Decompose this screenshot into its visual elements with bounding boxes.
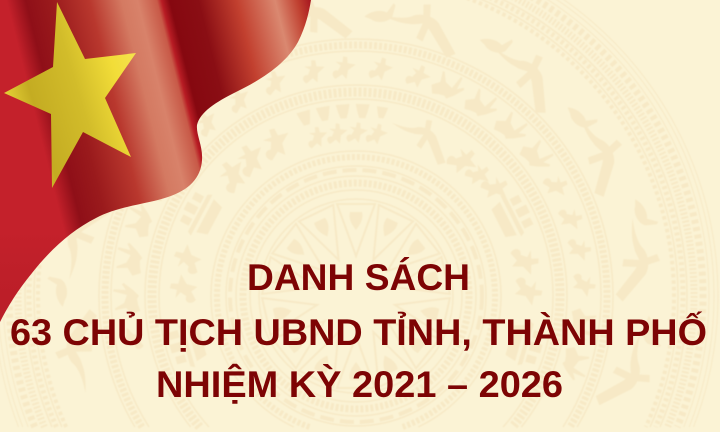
title <box>10 257 707 405</box>
icon: flag star <box>4 2 136 188</box>
title line 1: DANH SÁCH <box>247 257 470 298</box>
flag <box>0 0 311 322</box>
flag cloth <box>0 0 311 322</box>
title line 3: NHIỆM KỲ 2021 – 2026 <box>156 363 563 405</box>
middle drum band <box>99 39 613 427</box>
inner drum band <box>145 85 567 427</box>
figure ring: boats and people <box>165 104 548 372</box>
core drum bands <box>211 151 501 427</box>
title line 2: 63 CHỦ TỊCH UBND TỈNH, THÀNH PHỐ <box>10 311 707 353</box>
figure ring: birds and deer <box>113 56 599 383</box>
drum centre star <box>262 204 450 388</box>
